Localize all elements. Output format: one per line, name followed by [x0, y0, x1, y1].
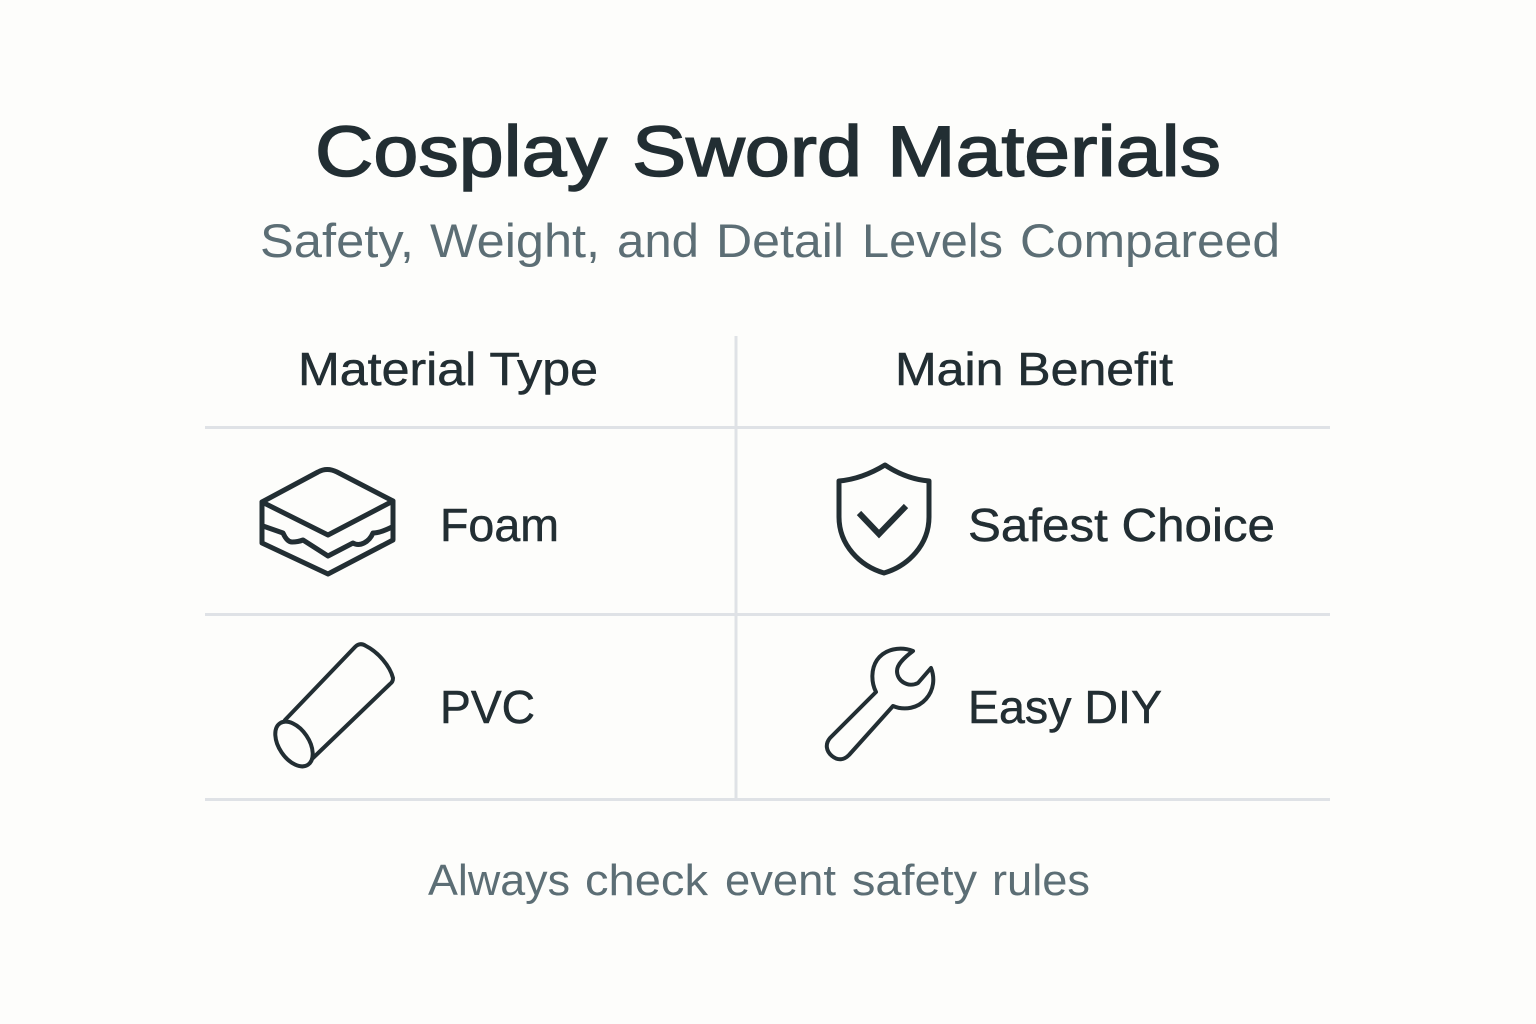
label: foam: Foam — [440, 499, 559, 551]
title: Sword — [632, 113, 862, 192]
icon: shield with check — [839, 465, 929, 573]
subtitle: Levels — [862, 214, 1003, 267]
title: Materials — [887, 113, 1221, 192]
label: pvc: PVC — [440, 681, 535, 733]
column heading: material type: Material Type — [298, 343, 598, 395]
subtitle: Detail — [716, 214, 844, 267]
table — [262, 343, 1275, 773]
icon: foam block — [262, 470, 393, 574]
footer note: safety — [852, 856, 977, 905]
subtitle: and — [617, 214, 699, 267]
footer note: Always — [428, 856, 570, 905]
title: Cosplay — [315, 113, 608, 192]
column heading: main benefit: Main Benefit — [895, 343, 1173, 395]
footer note: event — [725, 856, 836, 905]
subtitle: Weight, — [430, 214, 600, 267]
icon: wrench — [827, 649, 933, 759]
label: safest choice: Safest Choice — [968, 499, 1275, 551]
subtitle: Compareed — [1020, 214, 1280, 267]
label: easy diy: Easy DIY — [968, 681, 1162, 733]
subtitle: Safety, — [260, 214, 414, 267]
icon: pvc pipe — [268, 644, 393, 773]
footer note: check — [585, 856, 709, 905]
footer note: rules — [992, 856, 1090, 905]
